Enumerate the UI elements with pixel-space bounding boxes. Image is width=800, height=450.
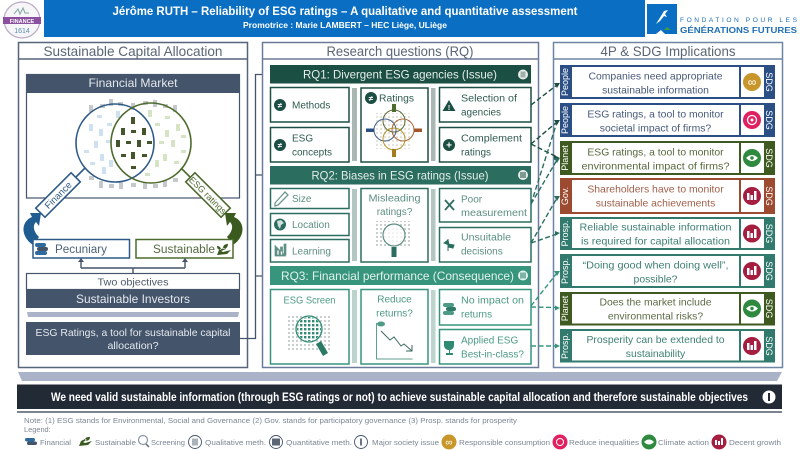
legend: quantitative method: Quantitative meth. [286, 438, 352, 447]
row: Planet, environmental risks: SDG [764, 299, 774, 318]
RQ1 box: Selection of agencies: ! [448, 105, 450, 112]
RQ3 header [270, 266, 531, 285]
row: People, appropriate information [560, 65, 775, 99]
row: Prosperity, reliable information: SDG [764, 224, 774, 243]
RQ1 box: Complement ratings: Complement [461, 134, 522, 144]
heading: Sustainable Capital Allocation [44, 43, 222, 59]
legend: decent growth: Decent growth [729, 438, 781, 447]
row: Prosperity, doing good [560, 254, 775, 288]
icon: major issue [762, 390, 776, 404]
row: Prosperity, reliable information [560, 217, 775, 250]
RQ2 box: Learning [270, 240, 349, 262]
RQ2 box: Misleading ratings: ratings? [377, 207, 413, 218]
legend: screening: Screening [151, 438, 185, 447]
row: Gov, shareholders: sustainable achievements [596, 198, 715, 210]
row: Prosperity, extended to sustainability: sustainability [626, 349, 686, 360]
RQ2 box: Size: Size [292, 194, 312, 205]
RQ3 box: No impact on returns: returns [461, 310, 492, 320]
legend: responsible consumption: Responsible consumption [459, 438, 550, 447]
legend: sustainable: Sustainable [95, 438, 136, 447]
header banner [44, 0, 645, 37]
RQ2 header [270, 166, 531, 184]
RQ3 box: Reduce returns: returns? [376, 308, 413, 320]
RQ1 divider bars [352, 88, 436, 161]
box: ESG Ratings question: allocation? [108, 340, 159, 352]
RQ2 box: Poor measurement [440, 188, 531, 222]
RQ1 box: ESG concepts [270, 128, 349, 162]
RQ2 box: Misleading ratings [361, 188, 428, 262]
shadow bar [27, 312, 239, 317]
box: Sustainable [136, 240, 233, 258]
RQ1 box: Ratings: ≠ [369, 94, 374, 103]
row: Planet, environmental impact: ESG ratings, a tool to monitor [587, 148, 724, 158]
row: People, appropriate information: SDG [764, 72, 774, 92]
row: Prosperity, extended to sustainability [560, 329, 775, 362]
RQ2 box: Misleading ratings: Misleading [368, 194, 420, 204]
legend: financial: Financial [40, 438, 71, 447]
logo: Finance HEC: 1614 [14, 28, 30, 35]
subtitle: Promotrice : Marie LAMBERT – HEC Liège, ULiège [243, 20, 447, 30]
RQ3 box: No impact on returns: No impact on [461, 296, 524, 306]
legend: major society issue: Major society issue [372, 438, 439, 447]
box: Two objectives / Sustainable Investors: Sustainable Investors [76, 292, 190, 306]
legend: reduce inequalities [552, 434, 639, 450]
RQ1 box: Methods: ≠ [278, 101, 283, 110]
legend [24, 425, 781, 450]
RQ1 box: ESG concepts: ESG [292, 134, 313, 144]
row: Prosperity, doing good: SDG [764, 261, 774, 281]
RQ1 box: ESG concepts: ≠ [278, 141, 283, 150]
logo: Finance HEC [3, 2, 41, 38]
box: Sustainable: Sustainable [153, 244, 215, 256]
legend: financial [25, 438, 71, 447]
box: Pecuniary [33, 240, 130, 258]
RQ2 box: Poor measurement: measurement [461, 208, 527, 219]
row: Planet, environmental risks: Does the market include [599, 298, 712, 308]
box: Pecuniary: Pecuniary [55, 244, 107, 256]
RQ1 box: Selection of agencies: Selection of [461, 94, 517, 104]
legend: responsible consumption: ∞ [445, 438, 453, 448]
RQ3 box: ESG Screen: ESG Screen [284, 296, 336, 306]
RQ1 box: Complement ratings [440, 128, 531, 162]
row: Gov, shareholders: SDG [764, 186, 774, 206]
note: Note: (1) ESG stands for Environmental, Social and Governance (2) Gov. stands for participatory governance (3) Prosp. stands for prosperity [24, 416, 517, 425]
row: Planet, environmental impact: environmental impact of firms? [582, 162, 730, 172]
legend: responsible consumption [442, 434, 550, 450]
RQ3 box: Applied ESG Best-in-class: Applied ESG [461, 336, 518, 346]
row: People, appropriate information: ∞ [748, 75, 756, 89]
panel: 4P and SDG Implications [553, 42, 783, 368]
panel: Research questions [262, 42, 539, 368]
row: Prosperity, doing good: possible? [634, 274, 678, 286]
box: Two objectives / Sustainable Investors [26, 274, 240, 308]
chart: falling returns [376, 322, 412, 359]
legend: decent growth [712, 434, 781, 450]
RQ3 box: No impact on returns [440, 290, 531, 325]
legend: climate action [642, 434, 709, 450]
heading: Research questions (RQ) [326, 43, 474, 59]
panel: Sustainable Capital Allocation [18, 42, 248, 368]
RQ2 box: Learning: Learning [292, 246, 331, 258]
row: People, appropriate information: Companies need appropriate [588, 72, 723, 82]
RQ2 box: Poor measurement: Poor [461, 194, 483, 206]
row: Planet, environmental impact [560, 141, 775, 175]
row: Prosperity, reliable information: is required for capital allocation [581, 236, 730, 248]
row: Prosperity, reliable information: Prosp. [560, 220, 570, 247]
row: Planet, environmental impact: SDG [764, 148, 774, 168]
shadow band [18, 372, 782, 381]
venn diagram of firms [72, 99, 194, 189]
RQ2 box: Unsuitable decisions [440, 228, 531, 262]
heading: 4P & SDG Implications [600, 43, 736, 59]
row: Gov, shareholders [560, 178, 775, 214]
row: Prosperity, extended to sustainability: SDG [764, 336, 774, 356]
RQ2 box: Unsuitable decisions: Unsuitable [461, 232, 511, 244]
row: Gov, shareholders: Gov. [560, 187, 570, 205]
legend: Legend: [24, 425, 51, 434]
legend: screening [138, 436, 185, 447]
RQ1 box: Selection of agencies: agencies [461, 108, 501, 118]
RQ1 box: Methods: Methods [292, 100, 330, 112]
RQ2 box: Location: Location [292, 220, 330, 231]
legend: major society issue [354, 436, 439, 448]
row: People, societal impact: SDG [764, 110, 774, 130]
row: Planet, environmental risks: Planet [560, 295, 570, 321]
financial market box: Financial Market [88, 76, 178, 90]
RQ3 box: Applied ESG Best-in-class: Best-in-class? [461, 350, 524, 360]
row: Prosperity, doing good: Prosp. [560, 258, 570, 284]
RQ3 divider bars [352, 290, 436, 363]
RQ1 box: Methods [270, 88, 349, 122]
box: Two objectives / Sustainable Investors: Two objectives [98, 278, 168, 288]
RQ1 box: Selection of agencies [440, 88, 531, 122]
row: Prosperity, extended to sustainability: Prosperity can be extended to [586, 335, 725, 346]
logo: Fondation pour les Générations Futures: FONDATION POUR LES [680, 17, 798, 24]
row: People, societal impact: ESG ratings, a tool to monitor [587, 110, 724, 120]
label: Finance magnifier handle: Finance [43, 180, 75, 212]
row: Gov, shareholders: Shareholders have to monitor [587, 184, 724, 196]
dashed arrows: RQ findings to implications [531, 85, 557, 346]
row: Planet, environmental impact: Planet [560, 145, 570, 171]
arrow: sustainable to ESG ratings [225, 213, 243, 245]
legend: qualitative method: Qualitative meth. [205, 438, 266, 447]
box: ESG Ratings question: ESG Ratings, a tool for sustainable capital [36, 327, 230, 339]
row: People, appropriate information: People [560, 68, 570, 96]
logo: Fondation pour les Générations Futures [647, 4, 798, 35]
title: Jérôme RUTH – Reliability of ESG ratings – A qualitative and quantitative assessment [112, 4, 578, 18]
arrow: pecuniary to finance [23, 213, 41, 245]
logo: Finance HEC: FINANCE [10, 19, 35, 25]
RQ1 header: RQ1: Divergent ESG agencies (Issue) [303, 68, 497, 82]
legend: qualitative method [188, 436, 266, 448]
connector: two objectives [81, 260, 185, 273]
legend: climate action: Climate action [658, 438, 709, 447]
conclusion bar [17, 384, 782, 409]
row: People, societal impact: People [560, 106, 570, 134]
RQ1 box: ESG concepts: concepts [292, 148, 332, 158]
RQ1 box: Ratings [361, 88, 428, 162]
RQ2 header: RQ2: Biases in ESG ratings (Issue) [312, 168, 488, 182]
row: People, societal impact: societal impact of firms? [600, 124, 711, 134]
row: People, societal impact [560, 103, 775, 137]
RQ3 box: Reduce returns: Reduce [377, 294, 412, 306]
RQ1 box: Complement ratings: ratings [461, 148, 491, 158]
RQ1 box: Complement ratings: + [446, 140, 452, 152]
label: ESG ratings magnifier handle: ESG ratings [187, 175, 229, 216]
row: Prosperity, doing good: “Doing good when doing well”, [582, 260, 728, 272]
RQ3 box: ESG Screen [270, 290, 349, 364]
RQ2 box: Size [270, 188, 349, 208]
dashed arrow heads [554, 83, 560, 348]
financial market box [26, 74, 240, 198]
RQ1 header [270, 65, 531, 84]
RQ1 box: Ratings: Ratings [379, 94, 414, 104]
RQ2 divider bars [352, 189, 436, 261]
logo: Fondation pour les Générations Futures: GÉNÉRATIONS FUTURES [680, 25, 797, 35]
legend: quantitative method [270, 436, 352, 448]
RQ3 box: Applied ESG Best-in-class [440, 330, 531, 364]
RQ3 header: RQ3: Financial performance (Consequence) [281, 269, 514, 283]
label: Finance magnifier handle [36, 173, 80, 217]
legend: reduce inequalities: Reduce inequalities [569, 438, 639, 447]
RQ2 box: Location [270, 214, 349, 236]
row: Planet, environmental risks [560, 292, 775, 326]
box: ESG Ratings question [26, 322, 240, 355]
row: People, appropriate information: sustainable information [602, 86, 709, 96]
row: Prosperity, extended to sustainability: Prosp. [560, 333, 570, 359]
connector arrows to research questions [240, 71, 270, 338]
RQ2 box: Unsuitable decisions: decisions [461, 246, 503, 258]
row: Prosperity, reliable information: Reliable sustainable information [580, 222, 732, 234]
RQ3 box: Reduce returns [361, 290, 428, 364]
legend: sustainable [79, 437, 136, 447]
row: Planet, environmental risks: environmental risks? [608, 312, 703, 322]
